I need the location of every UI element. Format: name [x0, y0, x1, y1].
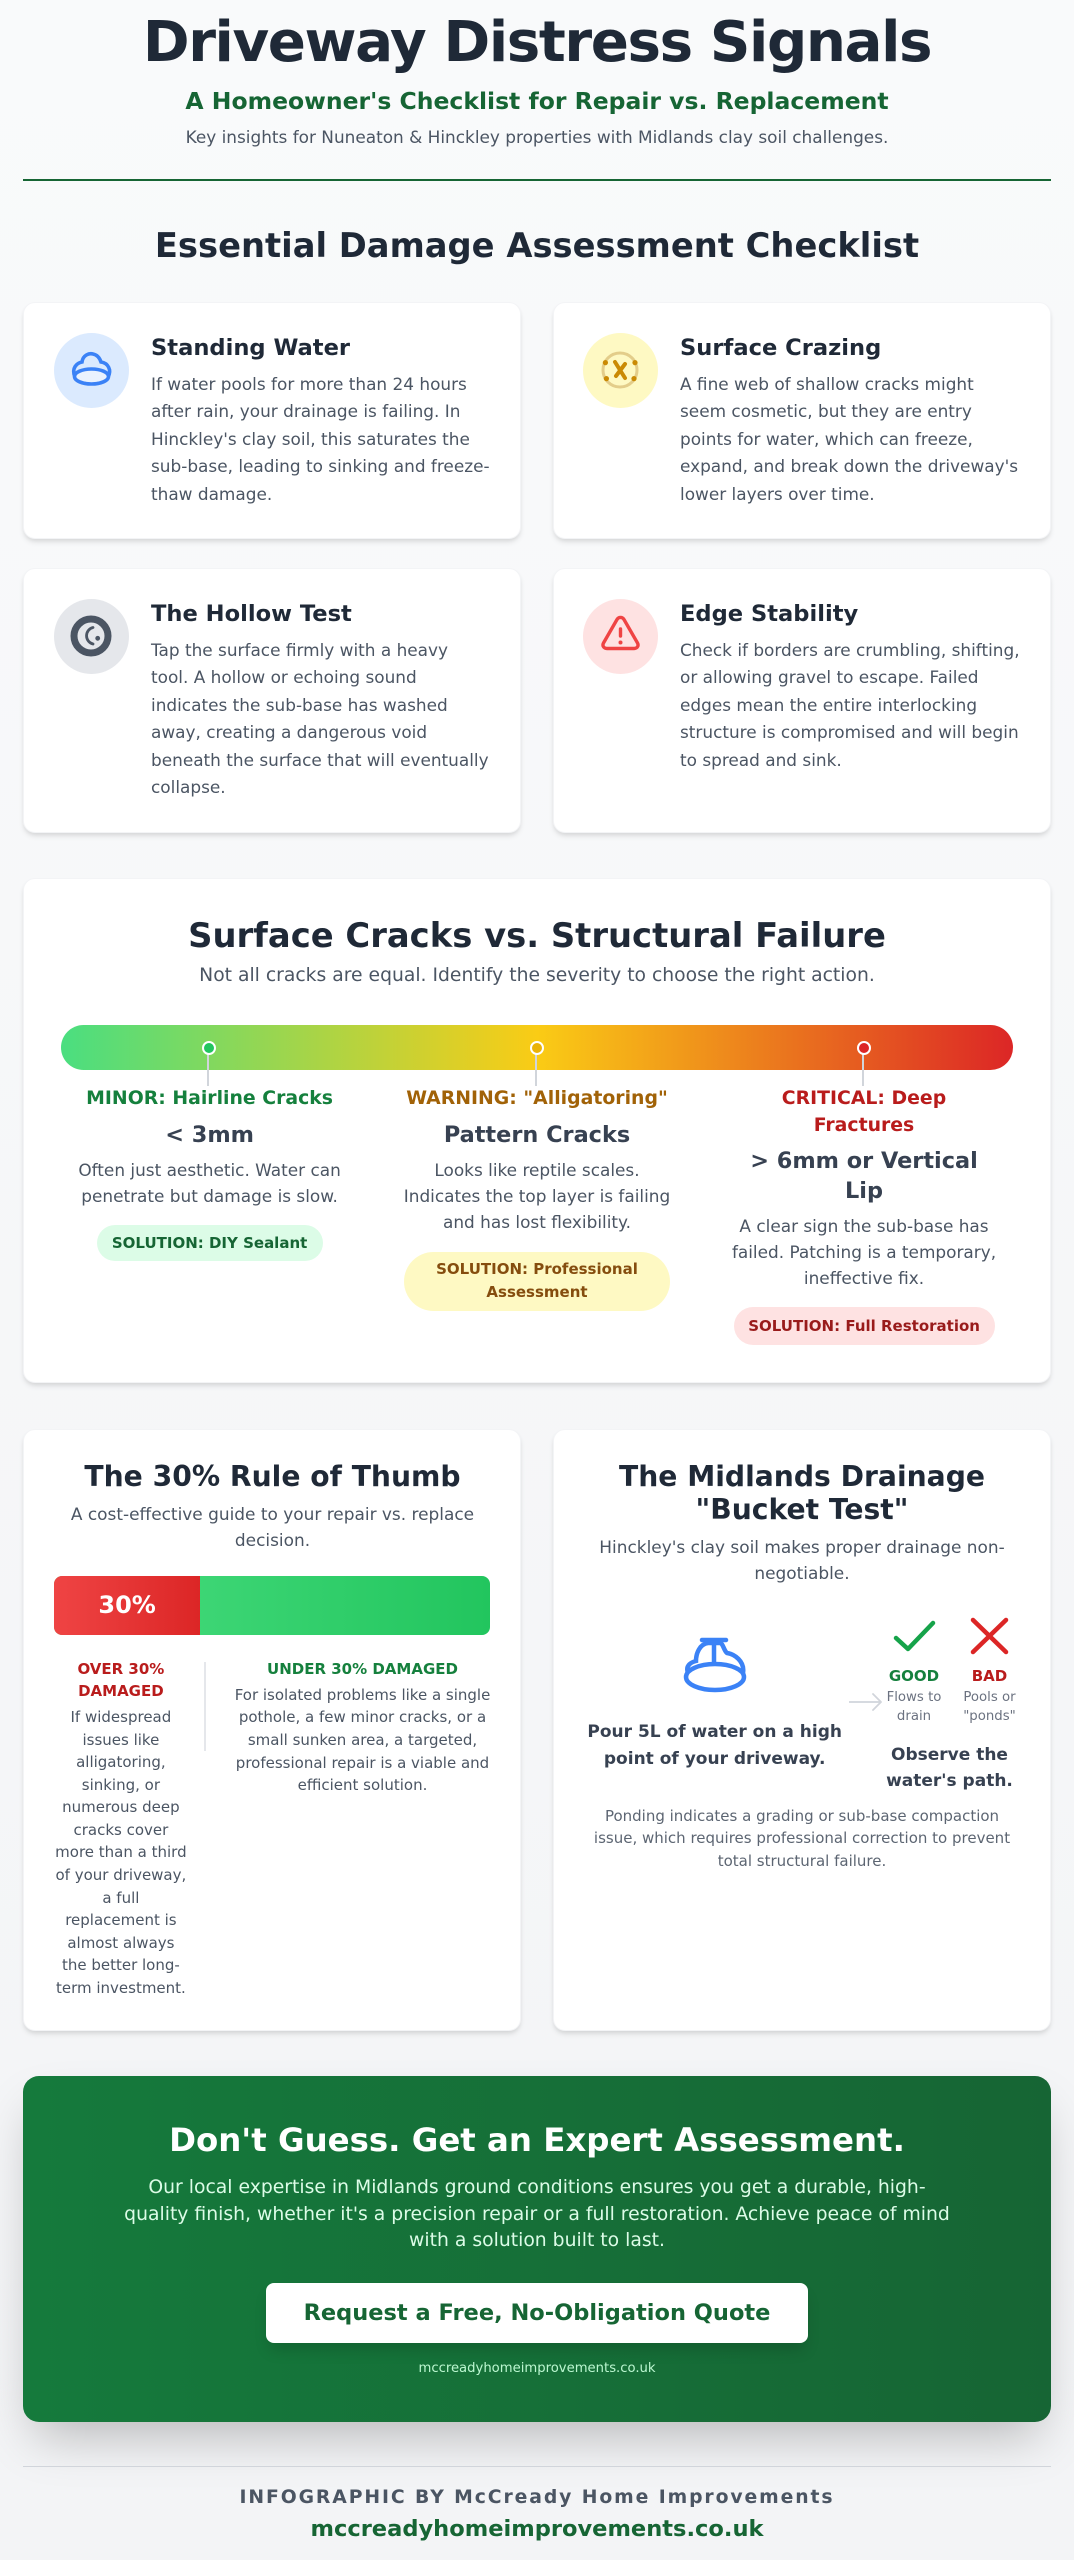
location note: Key insights for Nuneaton & Hinckley properties with Midlands clay soil challenges. [186, 127, 888, 147]
solution pill: SOLUTION: DIY Sealant [112, 1234, 307, 1252]
body text: a full [102, 1889, 139, 1907]
body text: Check if borders are crumbling, shifting, [680, 640, 1020, 660]
heading: The Midlands Drainage [619, 1460, 985, 1493]
heading: "Bucket Test" [696, 1493, 908, 1526]
heading: Standing Water [151, 334, 350, 360]
body text: replacement is [65, 1911, 177, 1929]
body text: almost always [67, 1934, 174, 1952]
description: A clear sign the sub-base has [739, 1216, 989, 1236]
split bar [54, 1576, 490, 1635]
intro text [71, 1504, 474, 1550]
red 30 percent segment: 30% [98, 1591, 156, 1619]
closing note: total structural failure. [718, 1852, 886, 1870]
body text: Our local expertise in Midlands ground conditions ensures you get a durable, high- [148, 2177, 926, 2198]
column: warning [404, 1088, 670, 1311]
body text: Hinckley's clay soil, this saturates the [151, 429, 470, 449]
size: > 6mm or Vertical [750, 1148, 978, 1174]
bad outcome [963, 1618, 1016, 1724]
column divider [204, 1662, 206, 1751]
step 2 text: Observe the [891, 1744, 1008, 1764]
body text: collapse. [151, 777, 226, 797]
body text: more than a third [55, 1843, 187, 1861]
description [78, 1160, 341, 1206]
label: BAD [972, 1667, 1007, 1685]
button [266, 2283, 808, 2343]
body text: Tap the surface firmly with a heavy [151, 640, 448, 660]
red 30 percent segment [54, 1576, 200, 1635]
size [750, 1148, 978, 1204]
heading: Surface Cracks vs. Structural Failure [188, 916, 886, 955]
step 1 text: Pour 5L of water on a high [587, 1722, 842, 1742]
body text: to spread and sink. [680, 750, 842, 770]
body text: the better long- [62, 1956, 180, 1974]
body text [235, 1686, 490, 1794]
panel: standing water [23, 302, 521, 539]
intro text [599, 1537, 1005, 1583]
icon: cross [970, 1618, 1008, 1654]
heading: Don't Guess. Get an Expert Assessment. [169, 2121, 905, 2159]
note: Flows to [887, 1690, 941, 1704]
panel: call to action [23, 2076, 1051, 2422]
body text: If widespread [70, 1708, 171, 1726]
body text: or allowing gravel to escape. Failed [680, 667, 979, 687]
column: critical [732, 1088, 996, 1345]
solution pill [404, 1252, 670, 1310]
body text: A fine web of shallow cracks might [680, 374, 974, 394]
body text: beneath the surface that will eventually [151, 750, 489, 770]
header rule [23, 179, 1051, 181]
panel: surface crazing [553, 302, 1051, 539]
body text: issues like [82, 1731, 159, 1749]
intro text: Hinckley's clay soil makes proper drainage non- [599, 1537, 1005, 1557]
body text: after rain, your drainage is failing. In [151, 401, 460, 421]
step 1 text [587, 1722, 842, 1768]
solution pill: SOLUTION: Professional [436, 1260, 638, 1278]
body text: expand, and break down the driveway's [680, 456, 1018, 476]
body text: away, creating a dangerous void [151, 722, 427, 742]
description [732, 1216, 996, 1288]
body text: efficient solution. [298, 1776, 427, 1794]
good outcome [887, 1620, 941, 1724]
panel: surface cracks vs structural failure [23, 878, 1051, 1383]
label: UNDER 30% DAMAGED [267, 1660, 458, 1678]
body text: indicates the sub-base has washed [151, 694, 448, 714]
subtitle: A Homeowner's Checklist for Repair vs. Replacement [185, 87, 889, 115]
body text: seem cosmetic, but they are entry [680, 401, 972, 421]
body text: pothole, a few minor cracks, or a [239, 1708, 486, 1726]
icon: edge stability [583, 599, 658, 674]
note: drain [897, 1708, 931, 1724]
size: Lip [845, 1178, 883, 1204]
severity label: CRITICAL: Deep [782, 1088, 946, 1109]
body text [55, 1708, 187, 1997]
body text: term investment. [56, 1979, 186, 1997]
intro text: A cost-effective guide to your repair vs. replace [71, 1504, 474, 1524]
body text: structure is compromised and will begin [680, 722, 1019, 742]
button: Request a Free, No-Obligation Quote [304, 2300, 770, 2326]
column: minor [78, 1088, 341, 1261]
closing note: Ponding indicates a grading or sub-base compaction [605, 1806, 999, 1824]
intro text: decision. [235, 1530, 310, 1550]
title: Driveway Distress Signals [143, 10, 931, 75]
credit: INFOGRAPHIC BY McCready Home Improvements [240, 2487, 834, 2508]
heading: The Hollow Test [151, 600, 352, 626]
body text: lower layers over time. [680, 484, 875, 504]
marker: critical [857, 1041, 871, 1086]
label: GOOD [889, 1667, 939, 1685]
body text [680, 374, 1018, 504]
website note: mccreadyhomeimprovements.co.uk [418, 2360, 656, 2376]
body text: points for water, which can freeze, [680, 429, 973, 449]
intro text: Not all cracks are equal. Identify the severity to choose the right action. [199, 965, 875, 986]
column: under 30 [235, 1660, 490, 1794]
heading: The 30% Rule of Thumb [84, 1460, 461, 1493]
pattern name: Pattern Cracks [444, 1122, 630, 1148]
description: penetrate but damage is slow. [81, 1186, 338, 1206]
intro text: negotiable. [754, 1563, 850, 1583]
icon: check [894, 1620, 936, 1652]
description: Often just aesthetic. Water can [78, 1160, 341, 1180]
body text: thaw damage. [151, 484, 272, 504]
note: "ponds" [963, 1708, 1016, 1724]
body text: alligatoring, [76, 1753, 166, 1771]
section heading: checklist: Essential Damage Assessment Checklist [155, 226, 919, 265]
description: and has lost flexibility. [443, 1212, 631, 1232]
panel: edge stability [553, 568, 1051, 833]
step 1 text: point of your driveway. [604, 1748, 826, 1768]
body text [151, 374, 490, 504]
closing note [594, 1806, 1010, 1870]
website: mccreadyhomeimprovements.co.uk [310, 2516, 764, 2542]
body text: small sunken area, a targeted, [248, 1731, 477, 1749]
description: failed. Patching is a temporary, [732, 1242, 996, 1262]
body text: numerous deep [62, 1798, 180, 1816]
footer [23, 2466, 1051, 2546]
severity gradient bar [61, 1025, 1013, 1086]
icon: standing water [54, 333, 129, 408]
note [963, 1690, 1016, 1724]
severity label: MINOR: Hairline Cracks [86, 1088, 333, 1109]
body text: tool. A hollow or echoing sound [151, 667, 417, 687]
description: Looks like reptile scales. [434, 1160, 640, 1180]
note [887, 1690, 941, 1724]
marker: minor [202, 1041, 216, 1086]
solution pill: SOLUTION: Full Restoration [748, 1317, 980, 1335]
body text: quality finish, whether it's a precision repair or a full restoration. Achieve peace of mind [124, 2204, 950, 2225]
heading: Edge Stability [680, 600, 858, 626]
label: DAMAGED [78, 1682, 164, 1700]
solution pill [97, 1225, 323, 1261]
size: < 3mm [165, 1122, 254, 1148]
body text: For isolated problems like a single [235, 1686, 490, 1704]
severity label: Fractures [814, 1115, 914, 1136]
body text [23, 2175, 1051, 2254]
header [23, 10, 1051, 181]
marker: warning [530, 1041, 544, 1086]
body text: edges mean the entire interlocking [680, 694, 977, 714]
heading [619, 1460, 985, 1526]
step 2 text [886, 1744, 1013, 1791]
body text: professional repair is a viable and [236, 1754, 489, 1772]
severity label: WARNING: "Alligatoring" [406, 1088, 668, 1109]
body text: cracks cover [73, 1821, 168, 1839]
solution pill: Assessment [486, 1283, 588, 1301]
arrow [849, 1693, 882, 1711]
panel: hollow test [23, 568, 521, 833]
icon: surface crazing [583, 333, 658, 408]
description: Indicates the top layer is failing [404, 1186, 670, 1206]
body text: If water pools for more than 24 hours [151, 374, 467, 394]
closing note: issue, which requires professional correction to prevent [594, 1829, 1010, 1847]
panel: 30% rule [23, 1428, 521, 2031]
severity label [782, 1088, 946, 1136]
step 2 text: water's path. [886, 1771, 1013, 1791]
panel: bucket test [553, 1428, 1051, 2031]
icon: bucket [684, 1638, 746, 1692]
heading: Surface Crazing [680, 334, 881, 360]
description: ineffective fix. [804, 1268, 924, 1288]
icon: hollow test [54, 599, 129, 674]
body text: with a solution built to last. [409, 2230, 665, 2251]
column: over 30 [55, 1660, 187, 1997]
body text: of your driveway, [55, 1866, 186, 1884]
solution pill [734, 1307, 995, 1345]
body text [680, 640, 1020, 770]
note: Pools or [963, 1690, 1016, 1704]
description [404, 1160, 670, 1232]
body text [150, 640, 489, 797]
label [77, 1660, 164, 1700]
label: OVER 30% [77, 1660, 164, 1678]
body text: sinking, or [82, 1776, 160, 1794]
body text: sub-base, leading to sinking and freeze- [151, 456, 490, 476]
